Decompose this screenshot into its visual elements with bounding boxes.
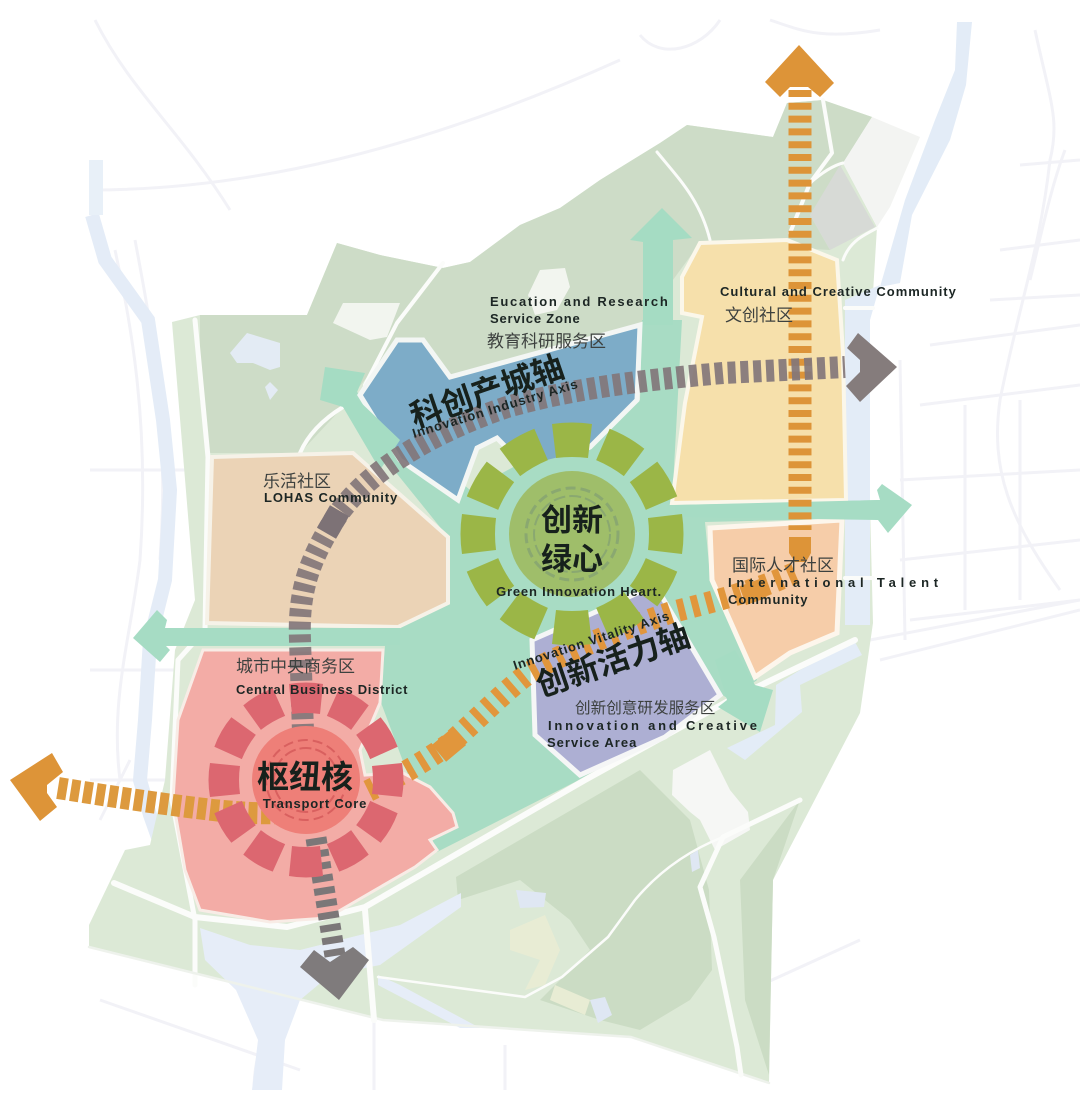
north grey plot [810,165,875,250]
label: education and research: Eucation and Research [490,294,669,309]
grey axis: innovation industry [300,367,845,732]
parcel: innovation and creative [532,585,720,775]
river: east [880,22,972,287]
parcel: LOHAS community [207,453,448,627]
river: southeast [727,642,862,760]
north white plot [843,117,920,227]
label: innovation and creative: 创新创意研发服务区 [575,698,715,717]
title: green innovation heart: Green Innovation Heart. [496,584,662,599]
title: innovation vitality axis: Innovation Vitality Axis [511,608,672,673]
label: cultural and creative: 文创社区 [725,306,793,325]
river: south [200,893,480,1090]
title: transport core: 枢纽核 [257,759,353,795]
grey axis: southern leg [316,838,335,956]
river: northwest stub [89,160,103,215]
label: LOHAS: 乐活社区 [263,472,331,491]
title: innovation industry axis: Innovation Industry Axis [410,376,580,441]
river: west [92,215,276,1010]
arrowhead: grey south [300,947,369,1000]
label: cultural and creative: Cultural and Creative Community [720,284,957,299]
title: green innovation heart [496,503,662,599]
title: innovation industry axis: 科创产城轴 [406,348,569,435]
orange axis: block 1 [432,728,466,762]
label: international talent [728,556,943,607]
orange axis: block 2 [739,579,767,605]
label: innovation and creative [547,698,760,750]
title: green innovation heart: 创新 [541,503,603,538]
white roads on site [89,100,877,1083]
mint green corridors [165,320,880,852]
mint axis: east arrow [675,484,912,533]
arrowhead: grey east [846,333,897,402]
label: cultural and creative [720,284,957,325]
label: innovation and creative: Service Area [547,735,637,750]
north hills [200,100,872,453]
mint axis: northwest arrow [320,367,400,470]
green innovation heart [460,422,684,646]
orange axis: block [789,537,811,562]
label: central business district [236,657,408,697]
parcel: cultural and creative [672,240,846,503]
label: international talent: 国际人才社区 [732,556,834,575]
label: education and research: Service Zone [490,311,581,326]
title: green innovation heart: 绿心 [541,542,603,577]
site base green [89,100,877,1083]
label: education and research: 教育科研服务区 [487,332,606,351]
parcel: education and research [360,325,640,500]
mint axis: west arrow [133,610,400,662]
label: LOHAS: LOHAS Community [264,490,398,505]
label: central business district: 城市中央商务区 [236,657,355,676]
parcel: international talent [710,520,842,677]
river: east channel [845,285,880,625]
label: international talent: Community [728,592,808,607]
parcel: CBD [173,650,457,922]
pond [230,333,280,400]
label: central business district: Central Business District [236,682,408,697]
title: innovation vitality axis: 创新活力轴 [532,617,695,704]
heart ring segments [460,422,684,646]
south park darker green [456,770,712,1030]
mint axis: southeast arrow [715,650,773,732]
label: international talent: International Talent [728,575,943,590]
arrowhead: orange north [765,45,834,97]
orange axis: western leg [58,788,320,813]
mint axis: north arrow [630,208,692,325]
core ring segments [208,682,404,878]
label: LOHAS [263,472,398,505]
clearing north [333,268,570,340]
title: transport core [257,759,367,811]
interchange [672,750,750,850]
southeast green strip [740,800,800,1075]
orange axis: north leg [788,90,812,530]
arrowhead: orange west [10,753,63,821]
south park yellow patches [510,915,590,1015]
grey axis: block [317,505,349,539]
label: innovation and creative: Innovation and Creative [548,718,760,733]
orange axis: innovation vitality [366,573,795,792]
transport core [208,682,404,878]
title: transport core: Transport Core [263,796,367,811]
label: education and research [487,294,669,351]
ponds south [516,850,700,1023]
